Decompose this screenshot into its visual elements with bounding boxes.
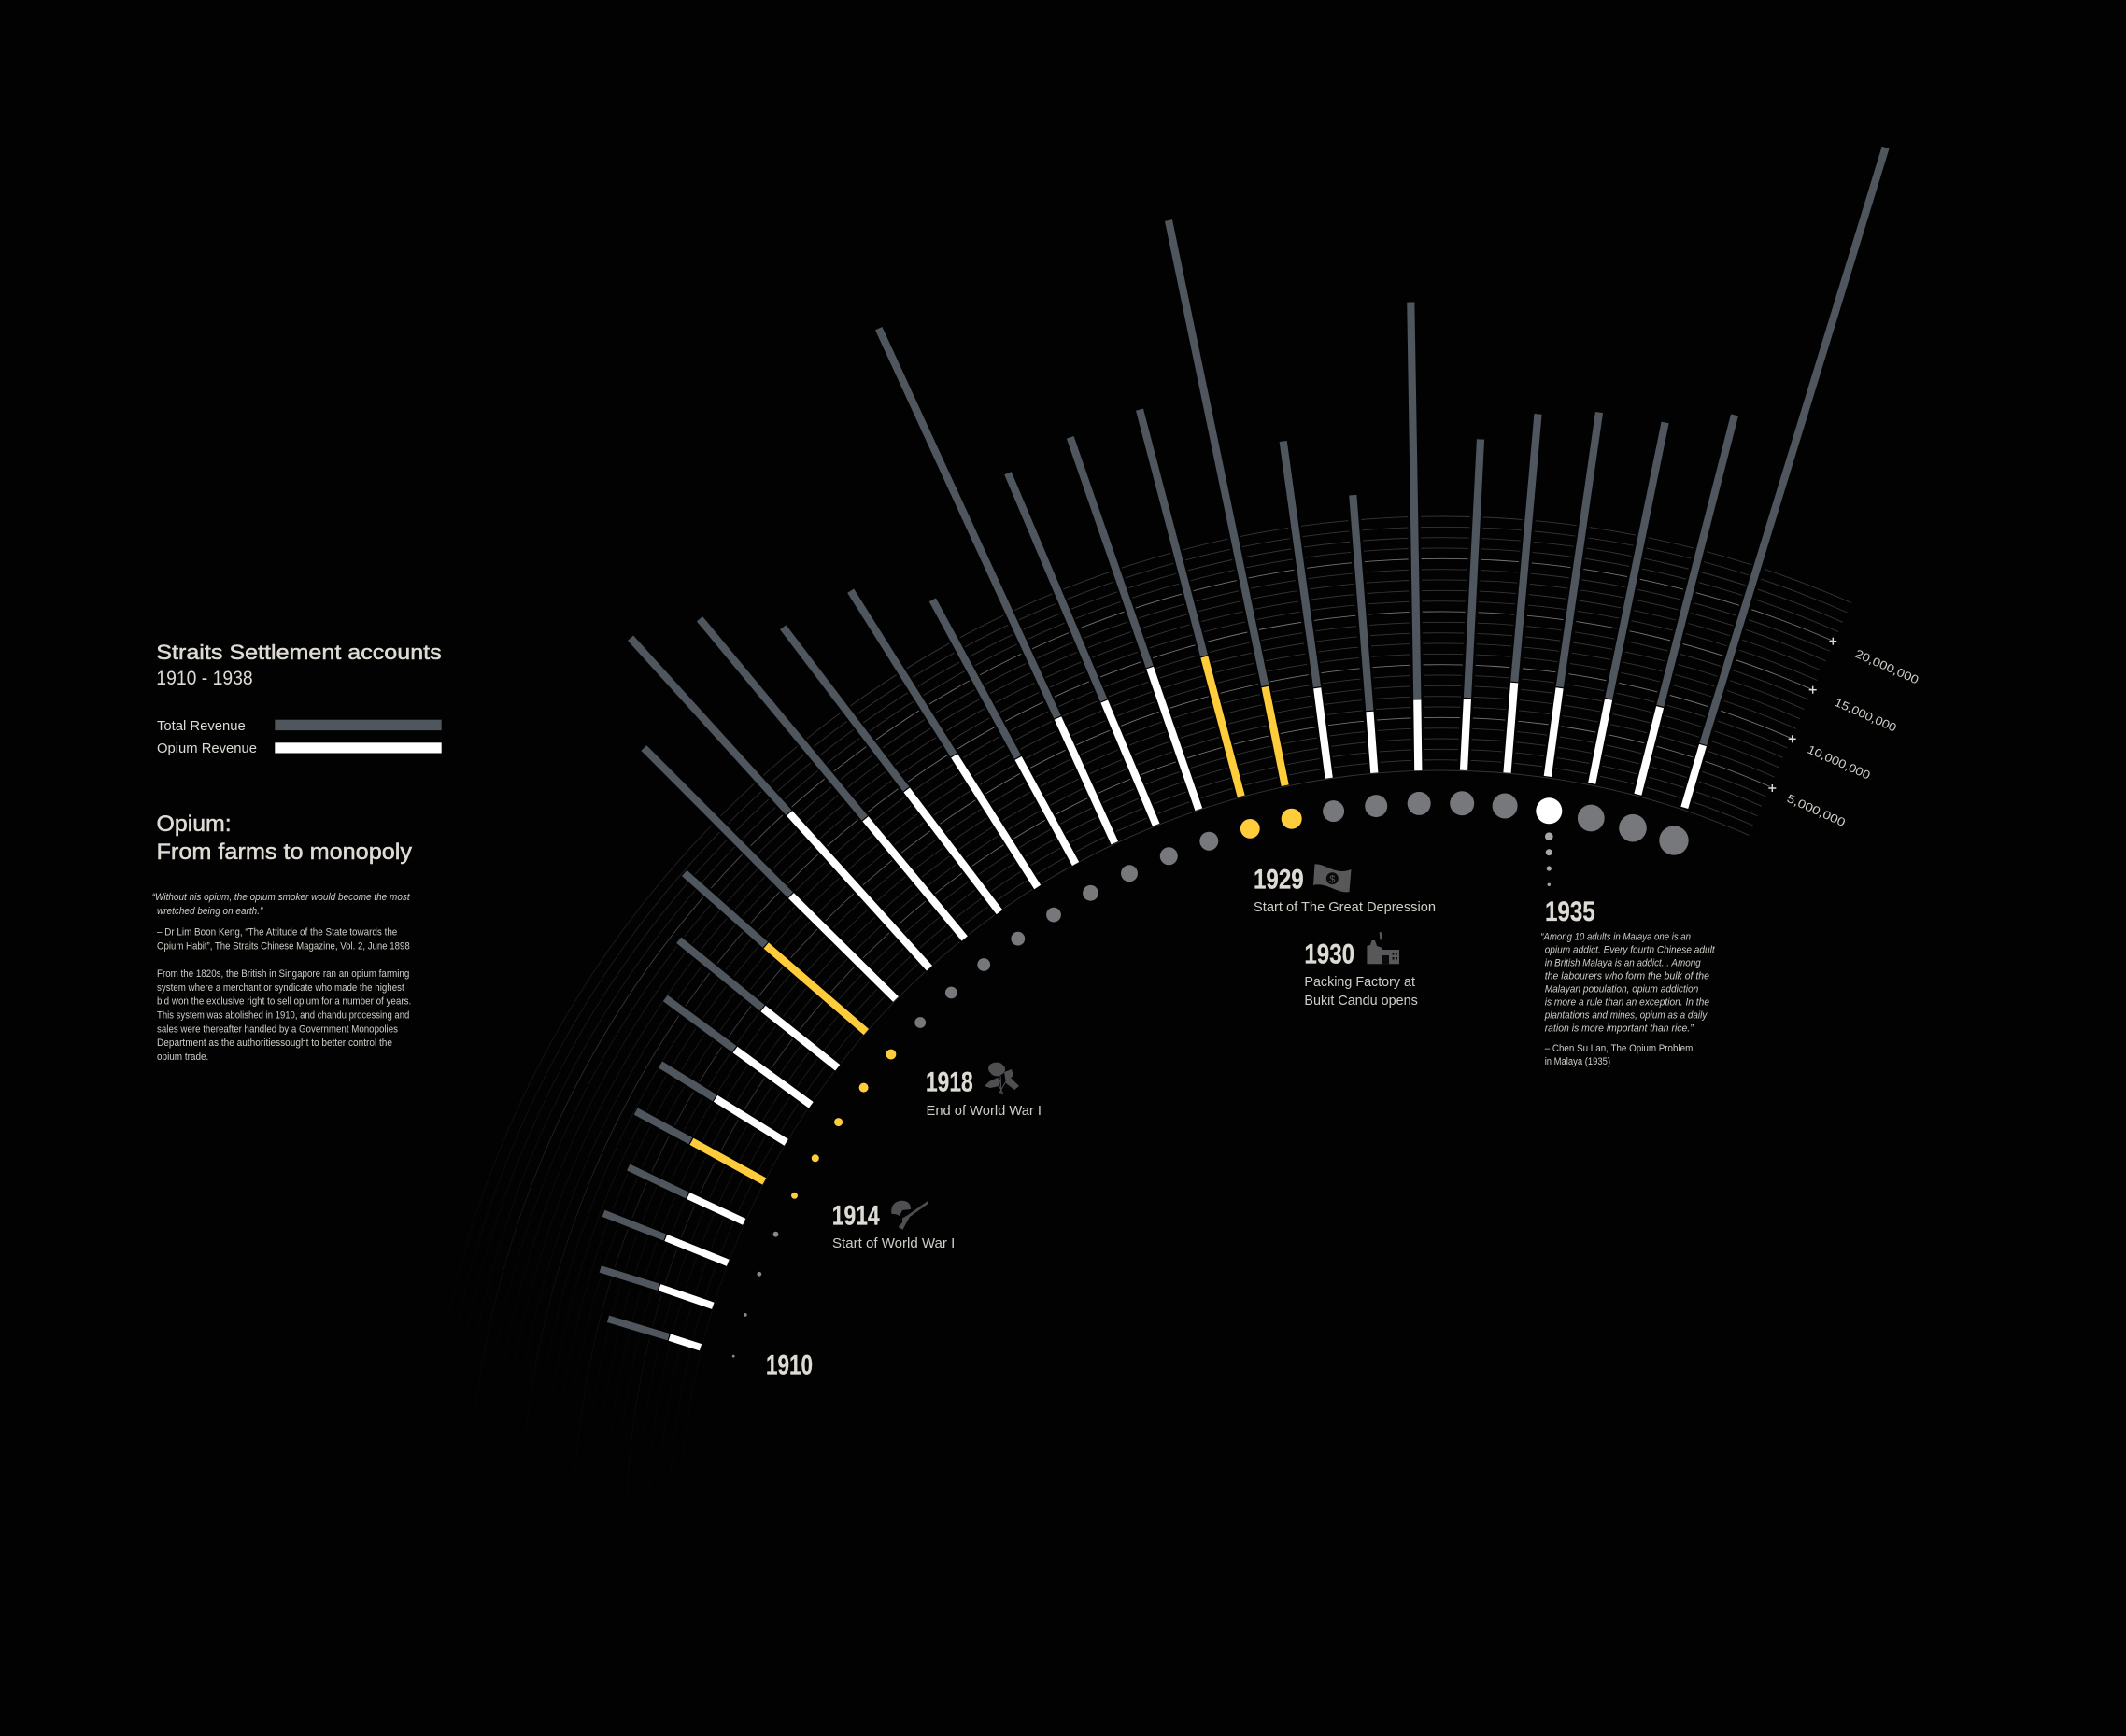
bar: 1917 (679, 940, 838, 1067)
text block: opium farming history: Department as the authoritiessought to better control the (157, 1037, 392, 1049)
text block: quote attribution: – Chen Su Lan, The Opium Problem (1545, 1043, 1693, 1054)
text block: opium farming history (157, 968, 411, 1063)
bar: 1910 (608, 1319, 701, 1348)
bar: 1925 (879, 329, 1114, 843)
label: 5,000,000: 5,000,000 (1785, 792, 1848, 829)
text block: Lim Boon Keng quote (152, 892, 411, 953)
bar: 1918 (685, 873, 866, 1032)
label: 10,000,000: 10,000,000 (1806, 742, 1872, 783)
text block: Among 10 adults quote (1540, 932, 1716, 1035)
legend: opium revenue (157, 741, 442, 756)
label: 15,000,000: 15,000,000 (1833, 696, 1898, 735)
bar chart: total and opium revenue 1910-1938 (601, 148, 1886, 1348)
text block: quote attribution: in Malaya (1935) (1545, 1056, 1610, 1067)
axis ticks and revenue scale labels (1768, 638, 1920, 829)
text block: opium farming history: This system was abolished in 1910, and chandu processing and (157, 1010, 409, 1022)
event: 1930 packing factory: Bukit Candu opens (1304, 993, 1418, 1009)
text block: Among 10 adults quote: opium addict. Every fourth Chinese adult (1545, 945, 1716, 956)
event: 1935 quote (1540, 896, 1716, 1067)
event: 1910: 1910 (766, 1350, 813, 1381)
bar: 1922 (783, 628, 999, 912)
icon: banknote (1313, 864, 1351, 892)
bar: 1923 (851, 591, 1038, 887)
bar: 1929 (1169, 220, 1285, 785)
event: 1914 start of World War I: 1914 (832, 1201, 880, 1232)
text block: quote attribution (1545, 1043, 1693, 1067)
text block: Among 10 adults quote: is more a rule than an exception. In the (1545, 997, 1709, 1009)
bar: 1916 (665, 998, 811, 1105)
text block: Among 10 adults quote: Malayan population, opium addiction (1545, 984, 1698, 995)
text block: Among 10 adults quote: in British Malaya is an addict... Among (1545, 958, 1701, 969)
bar: 1937 (1637, 415, 1735, 795)
bar: 1928 (1140, 410, 1241, 797)
bar: 1927 (1070, 437, 1198, 810)
legend years: 1910 - 1938 (156, 668, 253, 689)
bar: 1913 (629, 1167, 744, 1221)
text block: opium farming history: system where a merchant or syndicate who made the highest (157, 982, 404, 994)
event: 1930 packing factory (1304, 932, 1418, 1009)
event: 1930 packing factory: Packing Factory at (1304, 974, 1416, 990)
bar: 1938 (1684, 148, 1886, 808)
bar: 1911 (601, 1269, 713, 1306)
bar: 1936 (1592, 422, 1665, 783)
bar: 1935 (1548, 413, 1599, 776)
bar: 1932 (1410, 303, 1418, 770)
heading: Opium from farms to monopoly (157, 812, 412, 865)
text block: opium farming history: sales were thereafter handled by a Government Monopolies (157, 1023, 398, 1035)
1935 connector dots (1545, 832, 1553, 886)
event: 1914 start of World War I: Start of World War I (832, 1235, 955, 1251)
bar: 1921 (700, 619, 965, 939)
icon: helmet and rifle (891, 1201, 928, 1230)
text block: Lim Boon Keng quote: “Without his opium, the opium smoker would become the most (152, 892, 411, 903)
text block: Lim Boon Keng quote: wretched being on earth.” (157, 906, 264, 917)
legend heading: Straits Settlement accounts (156, 641, 442, 664)
event: 1929 start of the Great Depression (1254, 864, 1436, 915)
text block: Lim Boon Keng quote: Opium Habit”, The Straits Chinese Magazine, Vol. 2, June 1898 (157, 941, 410, 953)
tick: 20,000,000 (1829, 638, 1836, 645)
event: 1914 start of World War I (832, 1201, 955, 1251)
text block: Among 10 adults quote: the labourers who form the bulk of the (1545, 971, 1709, 982)
bar: 1924 (932, 600, 1076, 864)
bar: 1931 (1353, 495, 1374, 773)
event: 1935 quote: 1935 (1545, 896, 1595, 927)
text block: Among 10 adults quote: plantations and mines, opium as a daily (1544, 1010, 1708, 1022)
heading: Opium from farms to monopoly: Opium: (157, 812, 232, 837)
event: 1918 end of World War I: End of World War I (927, 1103, 1042, 1119)
event: 1930 packing factory: 1930 (1304, 939, 1354, 969)
bar: 1926 (1008, 473, 1156, 825)
bar: 1933 (1464, 439, 1481, 770)
bar: 1912 (603, 1213, 728, 1263)
bar: 1930 (1283, 441, 1329, 778)
text block: Lim Boon Keng quote: – Dr Lim Boon Keng, “The Attitude of the State towards the (157, 927, 397, 939)
bar: 1914 (636, 1111, 764, 1181)
tick: 10,000,000 (1789, 735, 1796, 742)
icon: poppies (985, 1063, 1019, 1094)
event: 1929 start of the Great Depression: 1929 (1254, 865, 1304, 896)
panel: legend (156, 641, 442, 756)
icon: banknote: $ (1329, 874, 1335, 885)
event: 1918 end of World War I: 1918 (926, 1066, 973, 1097)
bar: 1934 (1508, 414, 1538, 773)
legend: total revenue (157, 718, 442, 734)
label: 20,000,000: 20,000,000 (1853, 647, 1920, 686)
bar: 1920 (631, 638, 929, 968)
radial grid arcs (425, 516, 1851, 1532)
legend: total revenue: Total Revenue (157, 718, 246, 734)
text block: opium farming history: bid won the exclusive right to sell opium for a number of years. (157, 996, 411, 1008)
bar: 1915 (660, 1065, 787, 1142)
text block: opium farming history: opium trade. (157, 1051, 208, 1063)
tick: 5,000,000 (1768, 784, 1776, 792)
heading: Opium from farms to monopoly: From farms to monopoly (157, 840, 412, 865)
event: 1918 end of World War I (926, 1063, 1042, 1119)
timeline dots by year (732, 791, 1689, 1358)
text block: Among 10 adults quote: “Among 10 adults in Malaya one is an (1540, 932, 1691, 943)
icon: factory (1367, 932, 1399, 964)
bar: 1919 (644, 748, 896, 999)
text block: opium farming history: From the 1820s, the British in Singapore ran an opium farming (157, 968, 409, 980)
text block: Among 10 adults quote: ration is more important than rice.” (1545, 1023, 1694, 1035)
event: 1929 start of the Great Depression: Start of The Great Depression (1254, 899, 1436, 915)
legend: opium revenue: Opium Revenue (157, 741, 257, 756)
tick: 15,000,000 (1809, 686, 1817, 694)
